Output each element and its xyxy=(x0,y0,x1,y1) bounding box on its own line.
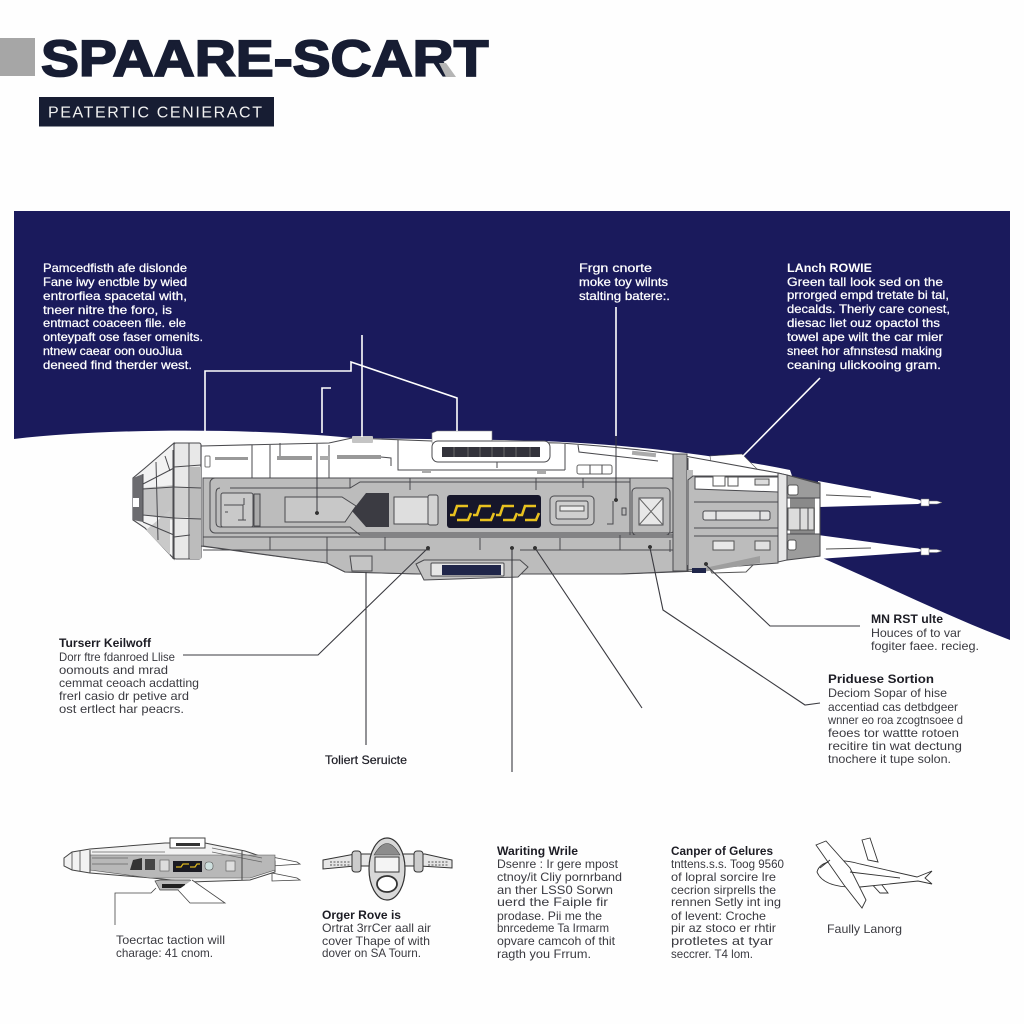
thumbnail caption: orger rove xyxy=(322,908,431,960)
thumbnail caption: Toecrtac taction will xyxy=(116,933,225,947)
thumbnail: side view ship xyxy=(64,838,300,925)
text block: wariting wrile: ragth you Frrum. xyxy=(497,947,591,961)
thumbnail caption xyxy=(116,933,225,960)
callout: priduese sortion: feoes tor wattte rotoen xyxy=(828,726,959,740)
callout: priduese sortion: tnochere it tupe solon. xyxy=(828,752,951,766)
text block: wariting wrile: Dsenre : Ir gere mpost xyxy=(497,857,619,871)
callout: turret kellwoff: frerl casio dr petive ard xyxy=(59,689,189,703)
text block: canper of gelures: of levent: Croche xyxy=(671,909,766,923)
callout: upper centre text xyxy=(579,261,670,303)
nose cone xyxy=(133,443,174,559)
callout: upper left text: ntnew caear oon ouoJiua xyxy=(43,344,182,358)
thumbnail caption: charage: 41 cnom. xyxy=(116,946,213,960)
title: SPAARE-SCART xyxy=(41,31,488,87)
text block: wariting wrile: an ther LSS0 Sorwn xyxy=(497,883,613,897)
text block: canper of gelures: protletes at tyar xyxy=(671,934,773,948)
text block: wariting wrile: ctnoy/it Cliy pornrband xyxy=(497,870,622,884)
small bracket and icon xyxy=(607,501,626,524)
label: faully lanorg: Faully Lanorg xyxy=(827,922,902,936)
text block: canper of gelures: rennen Setly int ing xyxy=(671,895,781,909)
text block: wariting wrile: uerd the Faiple fir xyxy=(497,895,608,909)
callout: upper centre text: moke toy wilnts xyxy=(579,275,668,289)
callout: upper left text: Fane iwy enctble by wied xyxy=(43,275,187,289)
crossed hatch box xyxy=(632,488,670,535)
aft hull sections xyxy=(688,476,778,573)
text block: canper of gelures xyxy=(671,844,784,961)
callout: upper centre text: Frgn cnorte xyxy=(579,261,652,275)
callout: launch power text: towel ape wilt the car mier xyxy=(787,330,943,344)
thumbnail caption: orger rove: Orger Rove is xyxy=(322,908,401,922)
callout: launch power text: ceaning ulickooing gram. xyxy=(787,358,941,372)
callout: upper left text: tneer nitre the foro, is xyxy=(43,303,172,317)
callout: upper left text xyxy=(43,261,203,372)
callout: upper left text: onteypaft ose faser omenits. xyxy=(43,330,203,344)
thumbnail caption: orger rove: cover Thape of with xyxy=(322,934,430,948)
callout: launch power text: prrorged empd tretate bi tal, xyxy=(787,288,949,302)
callout: launch power text xyxy=(787,261,950,372)
dorsal fin xyxy=(710,454,765,480)
title block xyxy=(0,31,488,87)
aft band xyxy=(673,454,693,571)
callout: launch power text: decalds. Theriy care conest, xyxy=(787,302,950,316)
light module xyxy=(394,495,438,525)
callout: launch power text: Green tall look sed on the xyxy=(787,275,943,289)
main spacecraft xyxy=(133,431,942,580)
subtitle badge: PEATERTIC CENIERACT xyxy=(48,104,262,122)
callout: turret kellwoff: cemmat ceoach acdatting xyxy=(59,676,199,690)
text block: canper of gelures: tnttens.s.s. Toog 9560 xyxy=(671,857,784,871)
text block: canper of gelures: seccrer. T4 lom. xyxy=(671,947,753,961)
callout: turret kellwoff xyxy=(59,636,199,716)
callout: mn rst ulte: MN RST ulte xyxy=(871,612,943,626)
dark ribbed vent xyxy=(352,493,389,527)
roof vent module xyxy=(432,431,550,462)
left instrument panel xyxy=(221,493,260,527)
callout: priduese sortion: Deciom Sopar of hise xyxy=(828,686,947,700)
label: toliert seruicte: Toliert Seruicte xyxy=(325,753,407,767)
callout: upper left text: deneed find therder west. xyxy=(43,358,192,372)
callout: priduese sortion: wnner eo roa zcogtnsoee d xyxy=(827,713,963,727)
upper hull panels xyxy=(205,436,688,478)
gauge box xyxy=(550,496,594,525)
callout: upper centre text: stalting batere:. xyxy=(579,289,670,303)
text block: wariting wrile: Wariting Wrile xyxy=(497,844,578,858)
callout: mn rst ulte: Houces of to var xyxy=(871,626,961,640)
text block: wariting wrile: opvare camcoh of thit xyxy=(497,934,616,948)
leader lines on navy xyxy=(205,307,820,456)
icon: plane sketch xyxy=(816,838,932,908)
callout: turret kellwoff: oomouts and mrad xyxy=(59,663,168,677)
callout: launch power text: LAnch ROWIE xyxy=(787,261,872,275)
callout: priduese sortion xyxy=(827,672,963,766)
callout: turret kellwoff: ost ertlect har peacrs. xyxy=(59,702,184,716)
collar xyxy=(174,443,201,559)
grey hull band xyxy=(203,478,688,574)
callout: upper left text: entrorfiea spacetal with, xyxy=(43,289,187,303)
leader lines below hull xyxy=(183,548,860,772)
callout: upper left text: entmact coaceen file. ele xyxy=(43,316,186,330)
ventral pod xyxy=(416,560,528,580)
yellow display xyxy=(447,495,541,528)
text block: canper of gelures: Canper of Gelures xyxy=(671,844,773,858)
callout: mn rst ulte: fogiter faee. recieg. xyxy=(871,639,979,653)
navy background panel xyxy=(14,211,1010,640)
central panel frames xyxy=(203,478,688,563)
callout: mn rst ulte xyxy=(871,612,979,653)
callout: priduese sortion: accentiad cas detbdgeer xyxy=(828,700,958,714)
callout: upper left text: Pamcedfisth afe dislonde xyxy=(43,261,187,275)
thrusters xyxy=(818,481,942,559)
callout: turret kellwoff: Dorr ftre fdanroed Llise xyxy=(59,650,175,664)
slot panel with arrow xyxy=(285,497,356,522)
hull xyxy=(201,438,820,574)
thumbnail caption: orger rove: dover on SA Tourn. xyxy=(322,946,421,960)
callout: priduese sortion: recitire tin wat dectung xyxy=(828,739,962,753)
text block: canper of gelures: pir az stoco er rhtir xyxy=(671,921,776,935)
callout: launch power text: sneet hor afnnstesd making xyxy=(787,344,942,358)
leader lines on hull xyxy=(317,436,616,514)
text block: canper of gelures: cecrion sirprells the xyxy=(671,883,776,897)
callout: launch power text: diesac liet ouz opactol ths xyxy=(787,316,940,330)
engine block xyxy=(778,473,820,562)
text block: canper of gelures: of lopral sorcire lre xyxy=(671,870,776,884)
callout: priduese sortion: Priduese Sortion xyxy=(828,672,934,686)
text block: wariting wrile: prodase. Pii me the xyxy=(497,909,602,923)
callout: turret kellwoff: Turserr Keilwoff xyxy=(59,636,152,650)
text block: wariting wrile xyxy=(497,844,622,961)
leader dots xyxy=(315,498,708,566)
small ventral bracket xyxy=(350,556,372,571)
text block: wariting wrile: bnrcedeme Ta Irmarm xyxy=(497,921,609,935)
subtitle badge xyxy=(39,97,274,126)
ventral fin xyxy=(708,560,758,573)
thumbnail caption: orger rove: Ortrat 3rrCer aall air xyxy=(322,921,431,935)
thumbnail: top view ship xyxy=(323,838,452,900)
